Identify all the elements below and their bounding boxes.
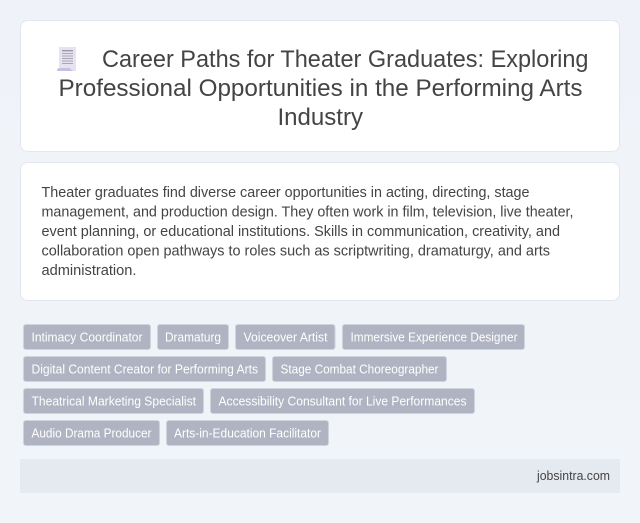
tag: Accessibility Consultant: Accessibility Consultant for Live Performances	[218, 394, 466, 408]
footer bar	[20, 459, 620, 493]
title	[58, 46, 588, 131]
tags: career roles	[24, 324, 524, 446]
tag: Intimacy Coordinator	[24, 324, 150, 350]
tag: Immersive Experience Designer: Immersive Experience Designer	[350, 330, 518, 344]
tag: Stage Combat Choreographer: Stage Combat Choreographer	[280, 362, 439, 376]
description text: event planning, or educational institutions. Skills in communication, creativity, and	[42, 224, 560, 240]
tag: Dramaturg: Dramaturg	[165, 330, 221, 344]
panel: description card	[20, 162, 620, 300]
tag: Audio Drama Producer	[24, 420, 160, 446]
title: Industry	[278, 104, 363, 131]
tag: Digital Content Creator	[24, 356, 266, 382]
tag: Accessibility Consultant	[210, 388, 474, 414]
tag: Immersive Experience Designer	[342, 324, 524, 350]
description text: administration.	[42, 263, 136, 279]
tag: Stage Combat Choreographer	[272, 356, 446, 382]
tag: Digital Content Creator: Digital Content Creator for Performing Arts	[32, 362, 258, 376]
tag: Intimacy Coordinator: Intimacy Coordinator	[32, 330, 143, 344]
footer bar: jobsintra.com	[536, 468, 610, 483]
title: Career Paths for Theater Graduates: Exploring	[102, 46, 588, 73]
description text: management, and production design. They often work in film, television, live theater,	[42, 204, 574, 220]
tag: Audio Drama Producer: Audio Drama Producer	[32, 426, 152, 440]
tag: Theatrical Marketing Specialist: Theatrical Marketing Specialist	[32, 394, 196, 408]
description text: Theater graduates find diverse career opportunities in acting, directing, stage	[42, 185, 530, 201]
tag: Dramaturg	[158, 324, 228, 350]
icon: paper scroll	[57, 47, 76, 71]
panel: title card	[20, 20, 620, 152]
description text	[42, 185, 574, 279]
tag: Theatrical Marketing Specialist	[24, 388, 204, 414]
title: Professional Opportunities in the Performing Arts	[58, 75, 582, 102]
tag: Voiceover Artist	[236, 324, 335, 350]
tag: Voiceover Artist: Voiceover Artist	[244, 330, 328, 344]
description text: collaboration open pathways to roles such as scriptwriting, dramaturgy, and arts	[42, 244, 550, 260]
tag: Arts-in-Education Facilitator: Arts-in-Education Facilitator	[174, 426, 322, 440]
tag: Arts-in-Education Facilitator	[166, 420, 328, 446]
